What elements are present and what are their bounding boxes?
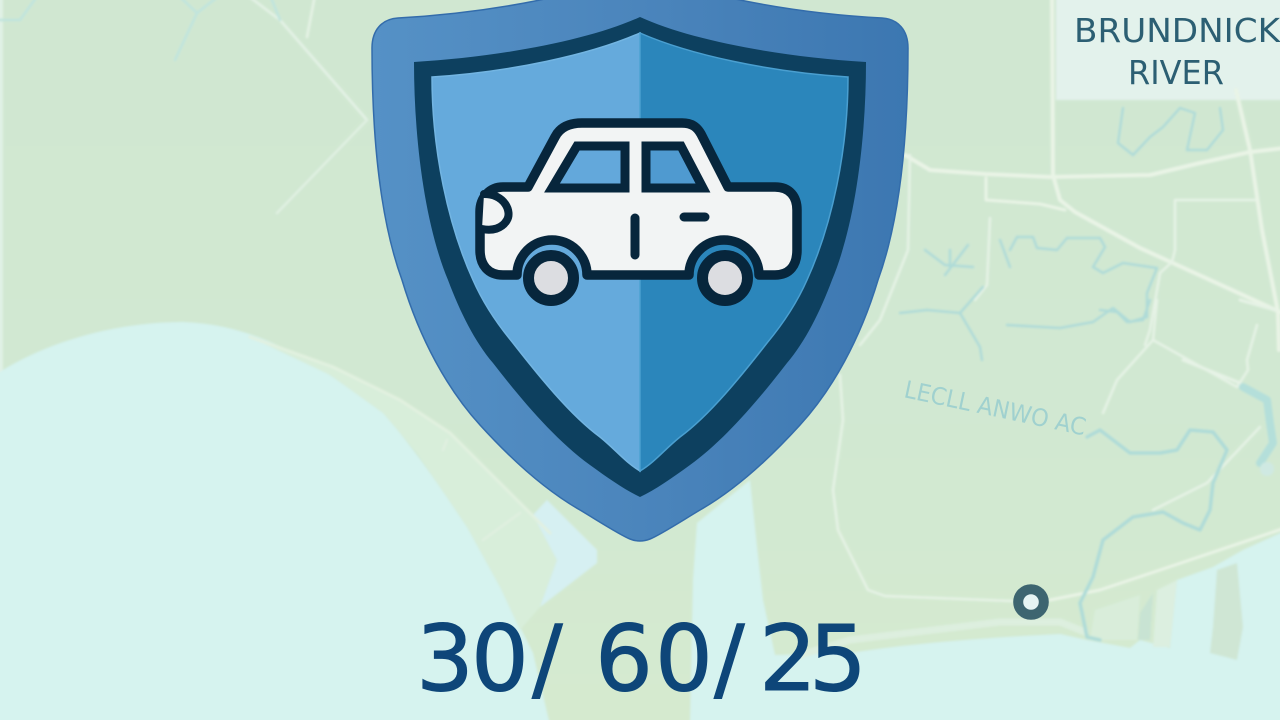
door line and handle: [635, 217, 705, 255]
map label: faded place name: LECLL ANWO AC: [902, 375, 1089, 441]
shield left panel: [432, 33, 640, 471]
map label: Brundnick River: RIVER: [1128, 53, 1224, 92]
map label: Brundnick River: BRUNDNICK: [1074, 11, 1280, 50]
car right wheel: [702, 256, 748, 300]
car headlight: [482, 194, 509, 230]
shield right panel: [640, 33, 848, 471]
map label: Brundnick River: [1074, 11, 1280, 92]
car left window: [552, 146, 625, 188]
car left wheel: [528, 256, 574, 300]
headline figures: 30/ 60/25: [416, 607, 867, 712]
car body: [480, 123, 797, 275]
icon: location marker: [1018, 589, 1044, 615]
car right window: [646, 146, 703, 188]
icon: car: [480, 123, 797, 300]
shield outer rim: [372, 0, 908, 541]
icon: shield with car: [372, 0, 908, 541]
shield dark band: [414, 17, 866, 497]
